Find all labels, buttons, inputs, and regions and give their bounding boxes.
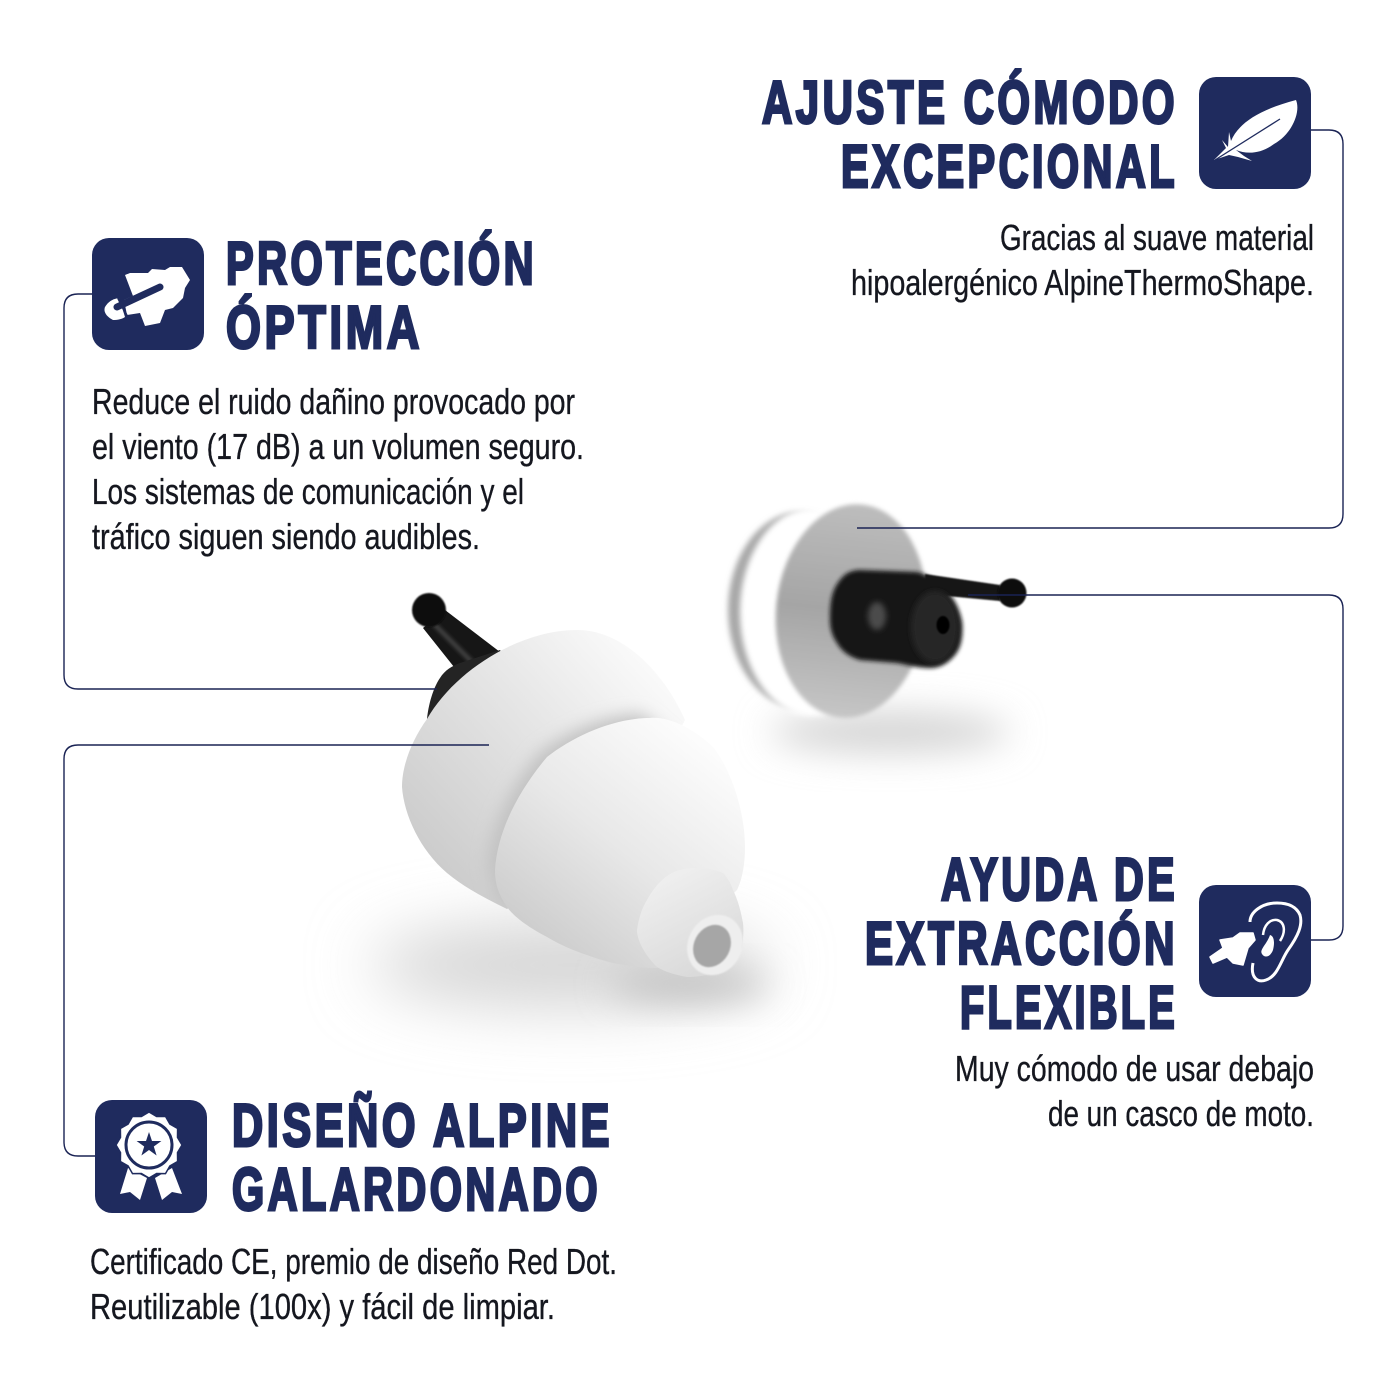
photo: foreground earplug: [370, 593, 770, 1007]
body text: [851, 217, 1314, 303]
heading: AJUSTE CÓMODO: [762, 69, 1178, 136]
connector: bottom left: [64, 745, 489, 1156]
heading: EXCEPCIONAL: [841, 133, 1178, 200]
heading: [232, 1092, 613, 1223]
body text: el viento (17 dB) a un volumen seguro.: [92, 426, 584, 467]
body text: de un casco de moto.: [1048, 1093, 1314, 1134]
body text: Reutilizable (100x) y fácil de limpiar.: [90, 1286, 555, 1327]
heading: ÓPTIMA: [226, 294, 423, 361]
icon: award rosette: [95, 1100, 207, 1213]
heading: EXTRACCIÓN: [865, 910, 1178, 977]
heading: DISEÑO ALPINE: [232, 1092, 613, 1159]
body text: [955, 1048, 1314, 1134]
photo: blurred rear earplug: [728, 497, 1026, 752]
body text: Los sistemas de comunicación y el: [92, 471, 524, 512]
icon: ear and plug: [1199, 885, 1311, 997]
heading: GALARDONADO: [232, 1156, 601, 1223]
body text: Gracias al suave material: [1000, 217, 1314, 258]
heading: AYUDA DE: [941, 846, 1178, 913]
heading: PROTECCIÓN: [226, 230, 537, 297]
heading: [226, 230, 537, 361]
body text: [90, 1241, 617, 1327]
heading: [762, 69, 1178, 200]
connector: top right: [857, 130, 1343, 528]
panel: diseño alpine: [90, 1092, 617, 1327]
body text: [92, 381, 584, 557]
panel: protección óptima: [92, 230, 584, 557]
heading: FLEXIBLE: [960, 974, 1178, 1041]
body text: Muy cómodo de usar debajo: [955, 1048, 1314, 1089]
connector: top left: [64, 294, 437, 689]
body text: Reduce el ruido dañino provocado por: [92, 381, 575, 422]
connector: bottom right: [968, 595, 1343, 940]
panel: ajuste cómodo: [762, 69, 1314, 303]
icon: feather: [1199, 77, 1311, 189]
body text: tráfico siguen siendo audibles.: [92, 516, 480, 557]
body text: Certificado CE, premio de diseño Red Dot.: [90, 1241, 617, 1282]
panel: ayuda de extracción: [865, 846, 1314, 1134]
heading: [865, 846, 1178, 1041]
icon: earplug: [92, 238, 204, 350]
